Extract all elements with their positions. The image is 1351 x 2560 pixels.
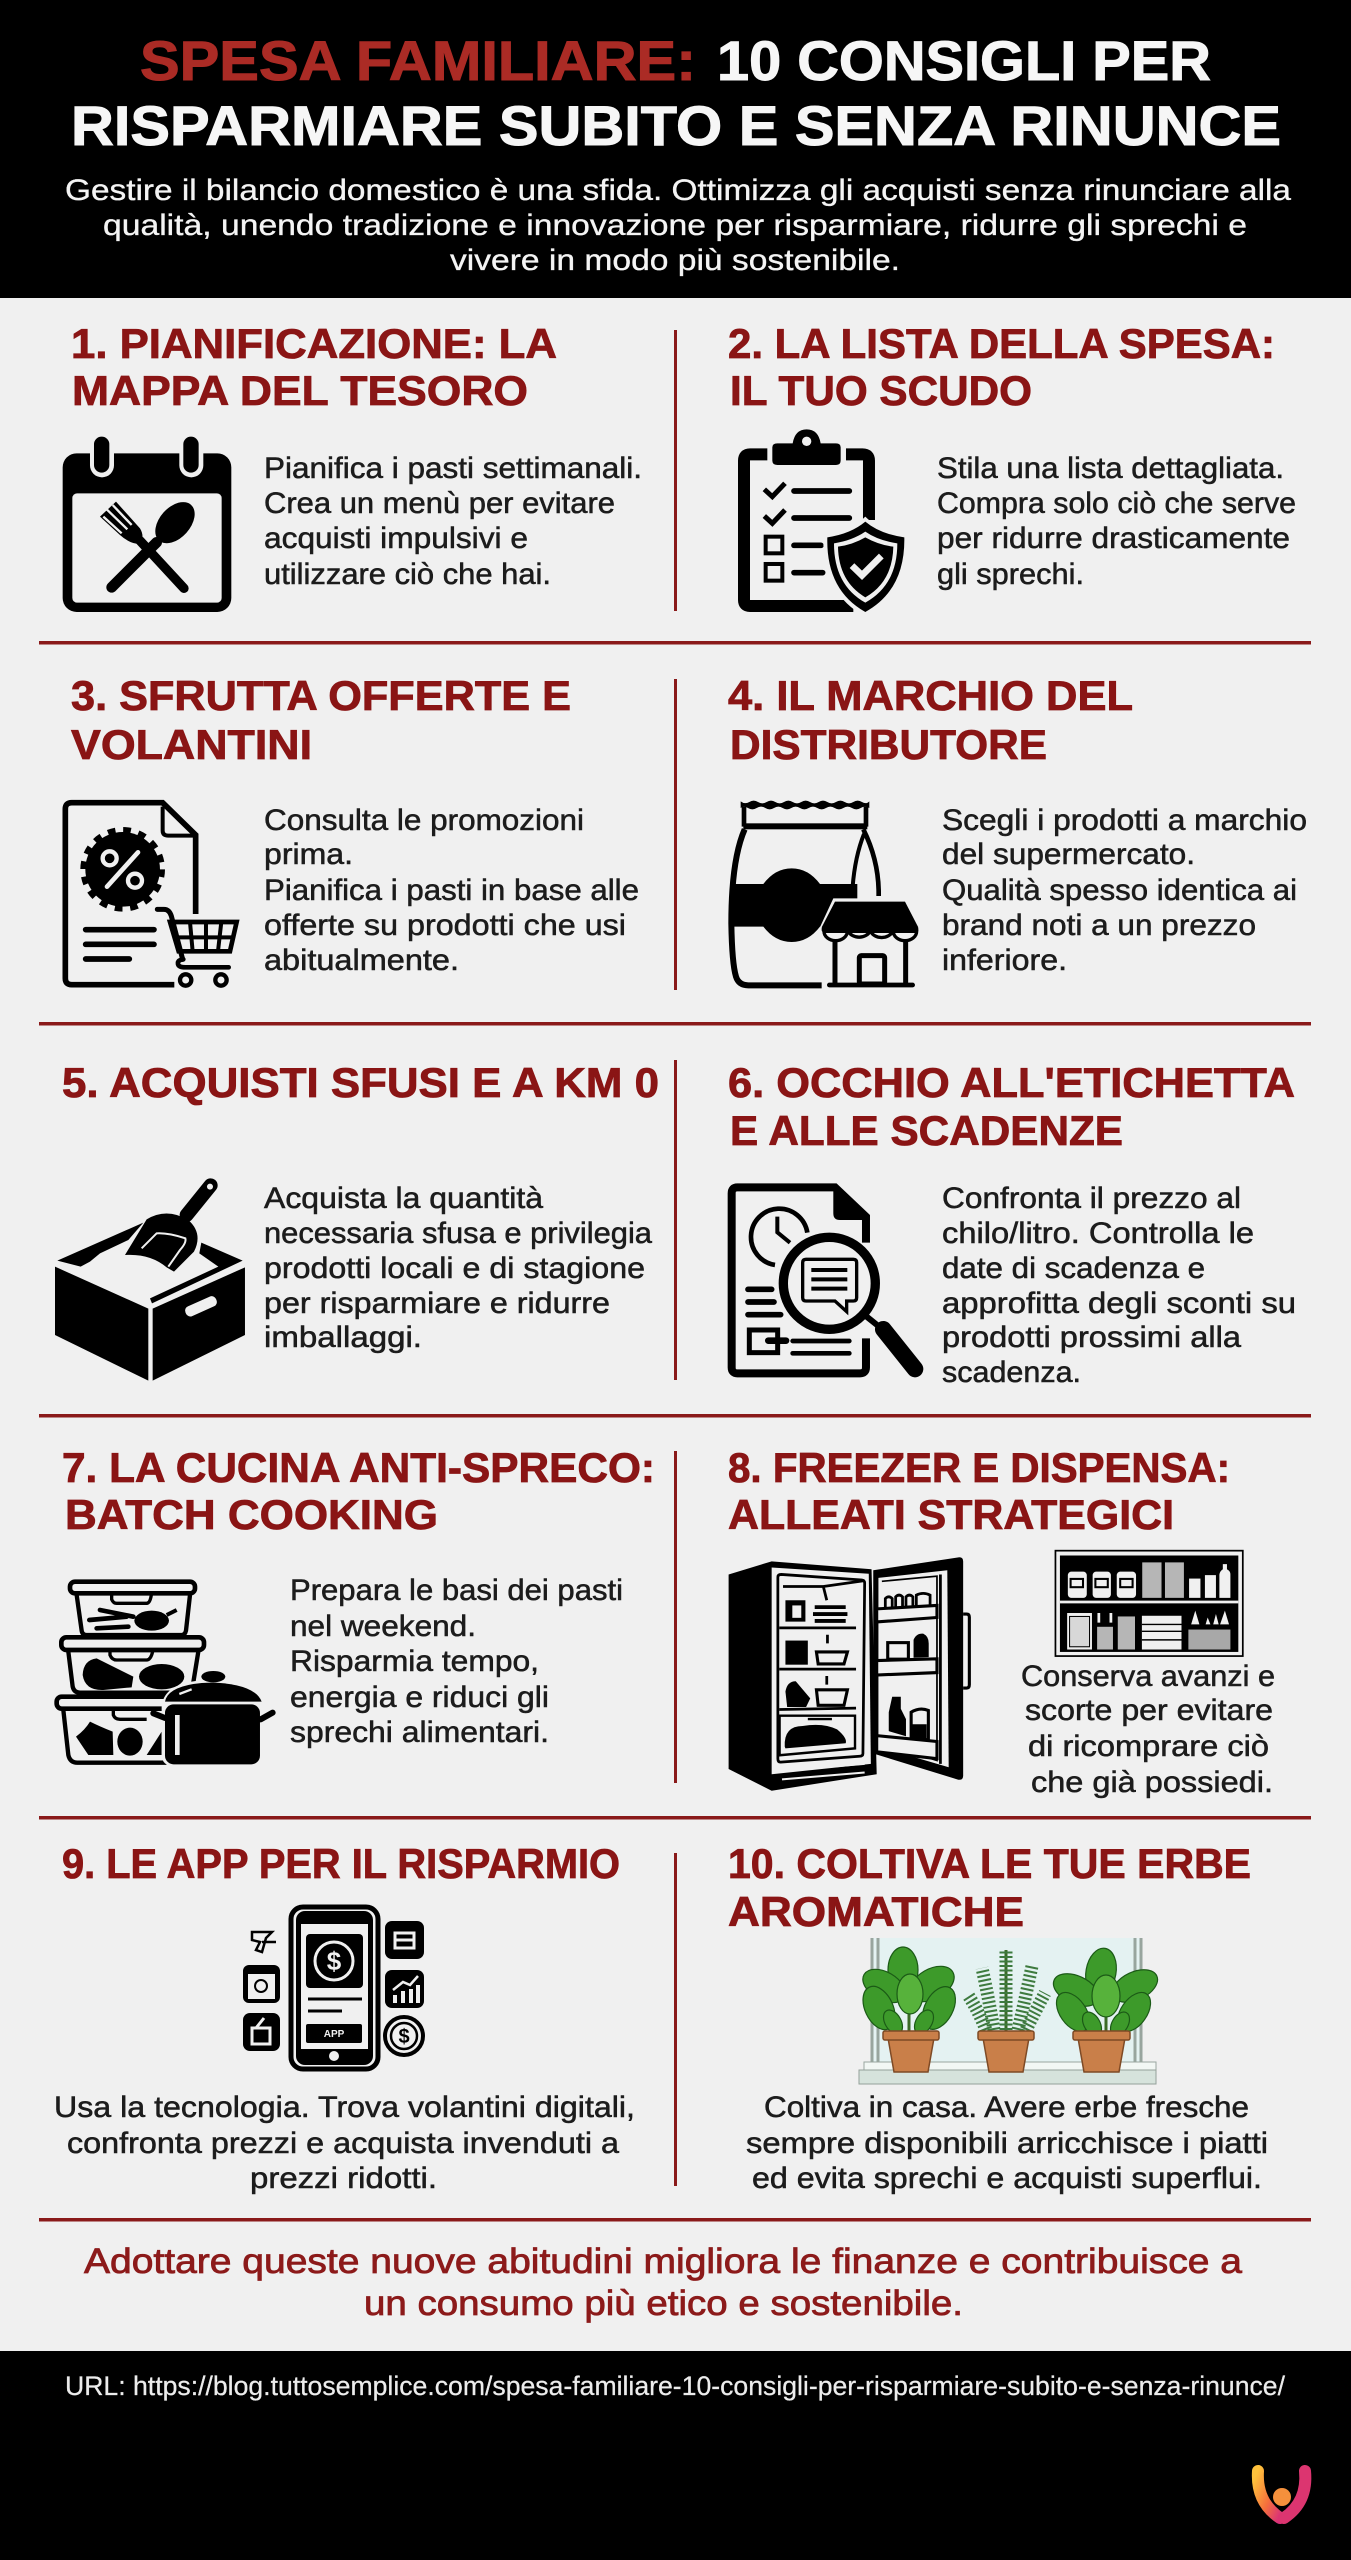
body text 2: Compra solo ciò che serve [937,487,1296,520]
heading 8: ALLEATI STRATEGICI [728,1491,1174,1538]
body text 5: imballaggi. [264,1321,422,1354]
panel: tip 5 [55,1059,659,1381]
heading 10: 10. COLTIVA LE TUE ERBE [728,1840,1251,1887]
icon: open fridge [729,1557,969,1791]
icon: calendar with cutlery [63,430,231,612]
heading 6: E ALLE SCADENZE [730,1107,1123,1154]
panel: tip 2 [728,320,1296,617]
closing statement: Adottare queste nuove abitudini migliora le finanze e contribuisce a [84,2242,1243,2281]
body text 3: prima. [264,838,353,871]
heading 3 [71,672,571,768]
body text 1: Crea un menù per evitare [264,487,615,520]
intro text [65,174,1291,277]
heading 1: 1. PIANIFICAZIONE: LA [71,320,557,367]
heading 5: 5. ACQUISTI SFUSI E A KM 0 [62,1059,659,1106]
body text 1: acquisti impulsivi e [264,522,528,555]
body text 7: nel weekend. [290,1610,476,1643]
panel: tip 1 [63,320,642,612]
closing statement: un consumo più etico e sostenibile. [364,2284,963,2323]
body text 5: per risparmiare e ridurre [264,1287,610,1320]
heading 7: 7. LA CUCINA ANTI-SPRECO: [62,1444,655,1491]
body text 6: chilo/litro. Controlla le [942,1217,1254,1250]
icon: pantry shelves [1055,1551,1243,1656]
body text 2: per ridurre drasticamente [937,522,1290,555]
heading 6 [728,1059,1295,1154]
footer band [0,2351,1351,2560]
icon: clipboard and shield [744,429,908,617]
body text 6: scadenza. [942,1356,1081,1389]
body text 3 [264,804,639,977]
body text 8: di ricomprare ciò [1028,1730,1269,1763]
body text 5: prodotti locali e di stagione [264,1252,645,1285]
heading 4 [728,672,1133,768]
title: 10 CONSIGLI PER [717,29,1211,92]
title: RISPARMIARE SUBITO E SENZA RINUNCE [71,94,1281,157]
icon: flyer with discount and cart [65,803,237,986]
closing statement [84,2242,1243,2323]
body text 4: Scegli i prodotti a marchio [942,804,1307,837]
body text 4: brand noti a un prezzo [942,909,1256,942]
body text 1: utilizzare ciò che hai. [264,558,551,591]
body text 10: ed evita sprechi e acquisti superflui. [752,2162,1262,2195]
intro text: Gestire il bilancio domestico è una sfida. Ottimizza gli acquisti senza rinunciare alla [65,174,1291,207]
body text 4: inferiore. [942,944,1067,977]
body text 7: Risparmia tempo, [290,1645,539,1678]
heading 7 [62,1444,655,1538]
body text 7: energia e riduci gli [290,1681,549,1714]
body text 6: approfitta degli sconti su [942,1287,1296,1320]
body text 7: Prepara le basi dei pasti [290,1574,623,1607]
body text 3: offerte su prodotti che usi [264,909,626,942]
heading 3: 3. SFRUTTA OFFERTE E [71,672,571,719]
body text 3: Pianifica i pasti in base alle [264,874,639,907]
heading 2: 2. LA LISTA DELLA SPESA: [728,320,1275,367]
heading 2 [728,320,1275,414]
illustration: herb pots on a windowsill [857,1938,1163,2084]
body text 10 [746,2091,1268,2195]
icon: bulk box and scoop [55,1184,245,1381]
body text 6: date di scadenza e [942,1252,1205,1285]
body text 9: confronta prezzi e acquista invenduti a [67,2127,619,2160]
icon: label under magnifier [732,1187,915,1373]
body text 3: Consulta le promozioni [264,804,584,837]
icon: private label bag and shop [730,801,924,985]
intro text: vivere in modo più sostenibile. [450,244,900,277]
body text 8: scorte per evitare [1025,1694,1273,1727]
title [71,29,1281,157]
body text 9: Usa la tecnologia. Trova volantini digitali, [54,2091,635,2124]
heading 3: VOLANTINI [71,721,312,768]
intro text: qualità, unendo tradizione e innovazione per risparmiare, ridurre gli sprechi e [103,209,1247,242]
body text 1: Pianifica i pasti settimanali. [264,452,642,485]
panel: tip 6 [728,1059,1296,1389]
body text 5: necessaria sfusa e privilegia [264,1217,652,1250]
body text 3: abitualmente. [264,944,459,977]
body text 6: Confronta il prezzo al [942,1182,1241,1215]
body text 8: che già possiedi. [1031,1766,1273,1799]
body text 2 [937,452,1296,591]
panel: tip 8 [728,1444,1275,1799]
body text 6 [942,1182,1296,1389]
header band [0,0,1351,298]
body text 4: del supermercato. [942,838,1195,871]
panel: tip 7 [57,1444,655,1767]
body text 2: Stila una lista dettagliata. [937,452,1284,485]
source url: URL: https://blog.tuttosemplice.com/spesa-familiare-10-consigli-per-risparmiare-subito-e-senza-rinunce/ [65,2371,1285,2401]
body text 7 [290,1574,623,1749]
heading 1: MAPPA DEL TESORO [72,367,528,414]
icon: smartphone apps: APP [324,2029,345,2040]
body text 5: Acquista la quantità [264,1182,543,1215]
heading 1 [71,320,557,414]
heading 8: 8. FREEZER E DISPENSA: [728,1444,1230,1491]
heading 8 [728,1444,1230,1538]
body text 6: prodotti prossimi alla [942,1321,1241,1354]
heading 10: AROMATICHE [728,1888,1024,1935]
icon: smartphone apps: $ [327,1946,342,1976]
icon: smartphone apps: $ [398,2026,410,2048]
icon: meal prep containers and pot [57,1582,273,1767]
body text 9 [54,2091,635,2195]
icon: smartphone apps [243,1907,424,2069]
body text 2: gli sprechi. [937,558,1084,591]
heading 7: BATCH COOKING [65,1491,438,1538]
body text 8: Conserva avanzi e [1021,1660,1275,1693]
body text 7: sprechi alimentari. [290,1716,549,1749]
body text 1 [264,452,642,591]
heading 4: DISTRIBUTORE [730,721,1047,768]
panel: tip 3 [65,672,639,986]
body text 5 [264,1182,652,1354]
heading 10 [728,1840,1251,1935]
heading 2: IL TUO SCUDO [730,367,1032,414]
panel: tip 4 [728,672,1307,985]
panel: tip 9 [54,1840,635,2195]
body text 8 [1021,1660,1275,1799]
heading 6: 6. OCCHIO ALL'ETICHETTA [728,1059,1295,1106]
title: SPESA FAMILIARE: [140,29,696,92]
body text 10: sempre disponibili arricchisce i piatti [746,2127,1268,2160]
panel: tip 10 [728,1840,1268,2195]
heading 4: 4. IL MARCHIO DEL [728,672,1133,719]
body text 10: Coltiva in casa. Avere erbe fresche [764,2091,1249,2124]
body text 9: prezzi ridotti. [250,2162,437,2195]
heading 9: 9. LE APP PER IL RISPARMIO [62,1840,620,1887]
body text 4: Qualità spesso identica ai [942,874,1297,907]
logo [1258,2471,1305,2518]
body text 4 [942,804,1307,977]
